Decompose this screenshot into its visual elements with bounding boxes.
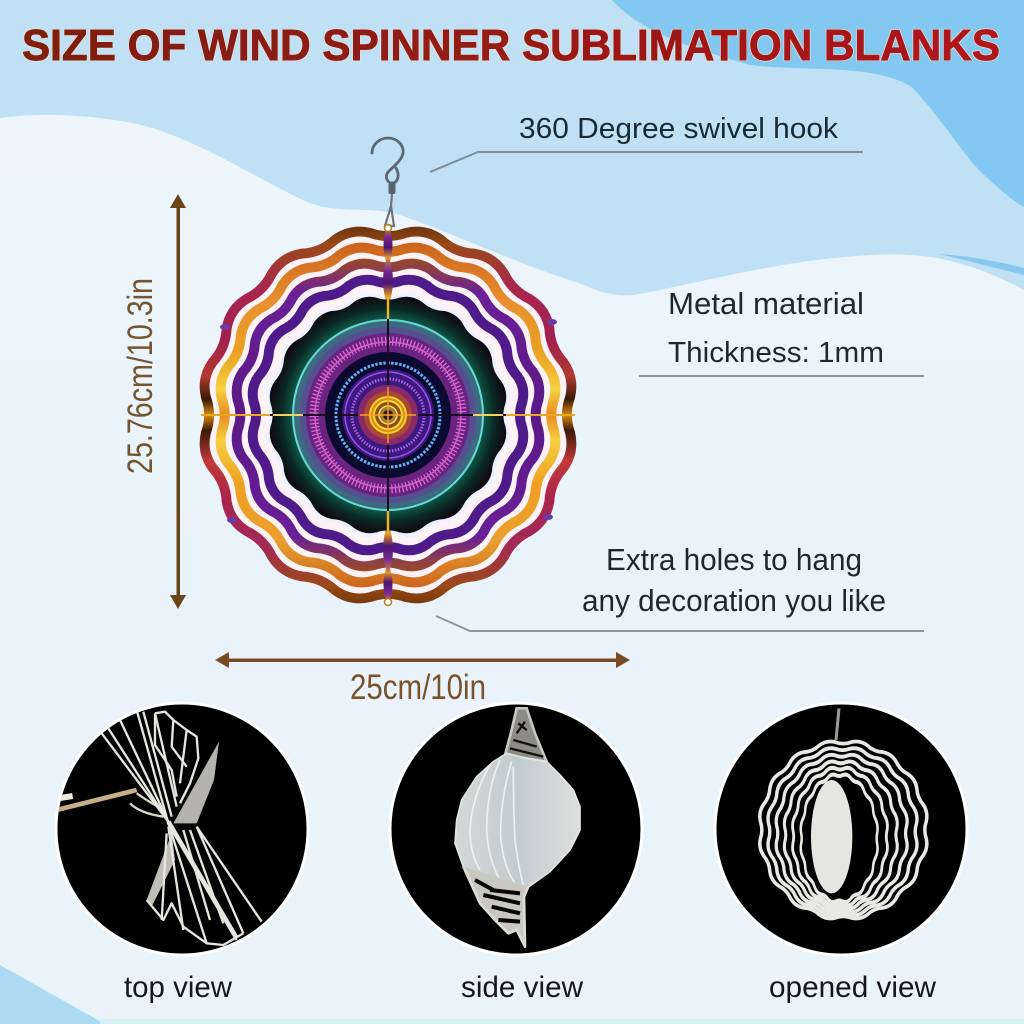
panel: top view (56, 703, 308, 955)
callout: extra holes (436, 542, 924, 631)
side view spinner (455, 708, 580, 947)
arrow: width dimension (215, 652, 630, 668)
panel: side view (390, 703, 642, 955)
label: top view: top view (124, 971, 232, 1004)
callout: extra holes: any decoration you like (582, 583, 886, 618)
label: height: 25.76cm/10.3in (121, 278, 160, 474)
callout: metal material thickness: Thickness: 1mm (668, 337, 884, 369)
callout: metal material thickness: Metal material (668, 286, 864, 321)
opened view spinner (760, 708, 927, 919)
spine (201, 224, 575, 606)
callout: extra holes: Extra holes to hang (606, 542, 862, 577)
label: side view: side view (461, 971, 583, 1004)
arrow: height dimension (170, 194, 186, 609)
panel: opened view (715, 703, 967, 955)
callout: 360 degree swivel hook: 360 Degree swivel hook (519, 113, 839, 145)
outer coloured bands (205, 232, 571, 598)
callout: metal material thickness (639, 286, 924, 376)
wind spinner (201, 224, 575, 606)
label: width: 25cm/10in (350, 668, 486, 707)
top view spinner (57, 710, 262, 945)
title: SIZE OF WIND SPINNER SUBLIMATION BLANKS (22, 21, 1000, 70)
inner disc (270, 297, 506, 533)
callout: 360 degree swivel hook (430, 113, 863, 172)
icon: swivel hook (372, 138, 403, 226)
label: opened view: opened view (769, 971, 936, 1004)
